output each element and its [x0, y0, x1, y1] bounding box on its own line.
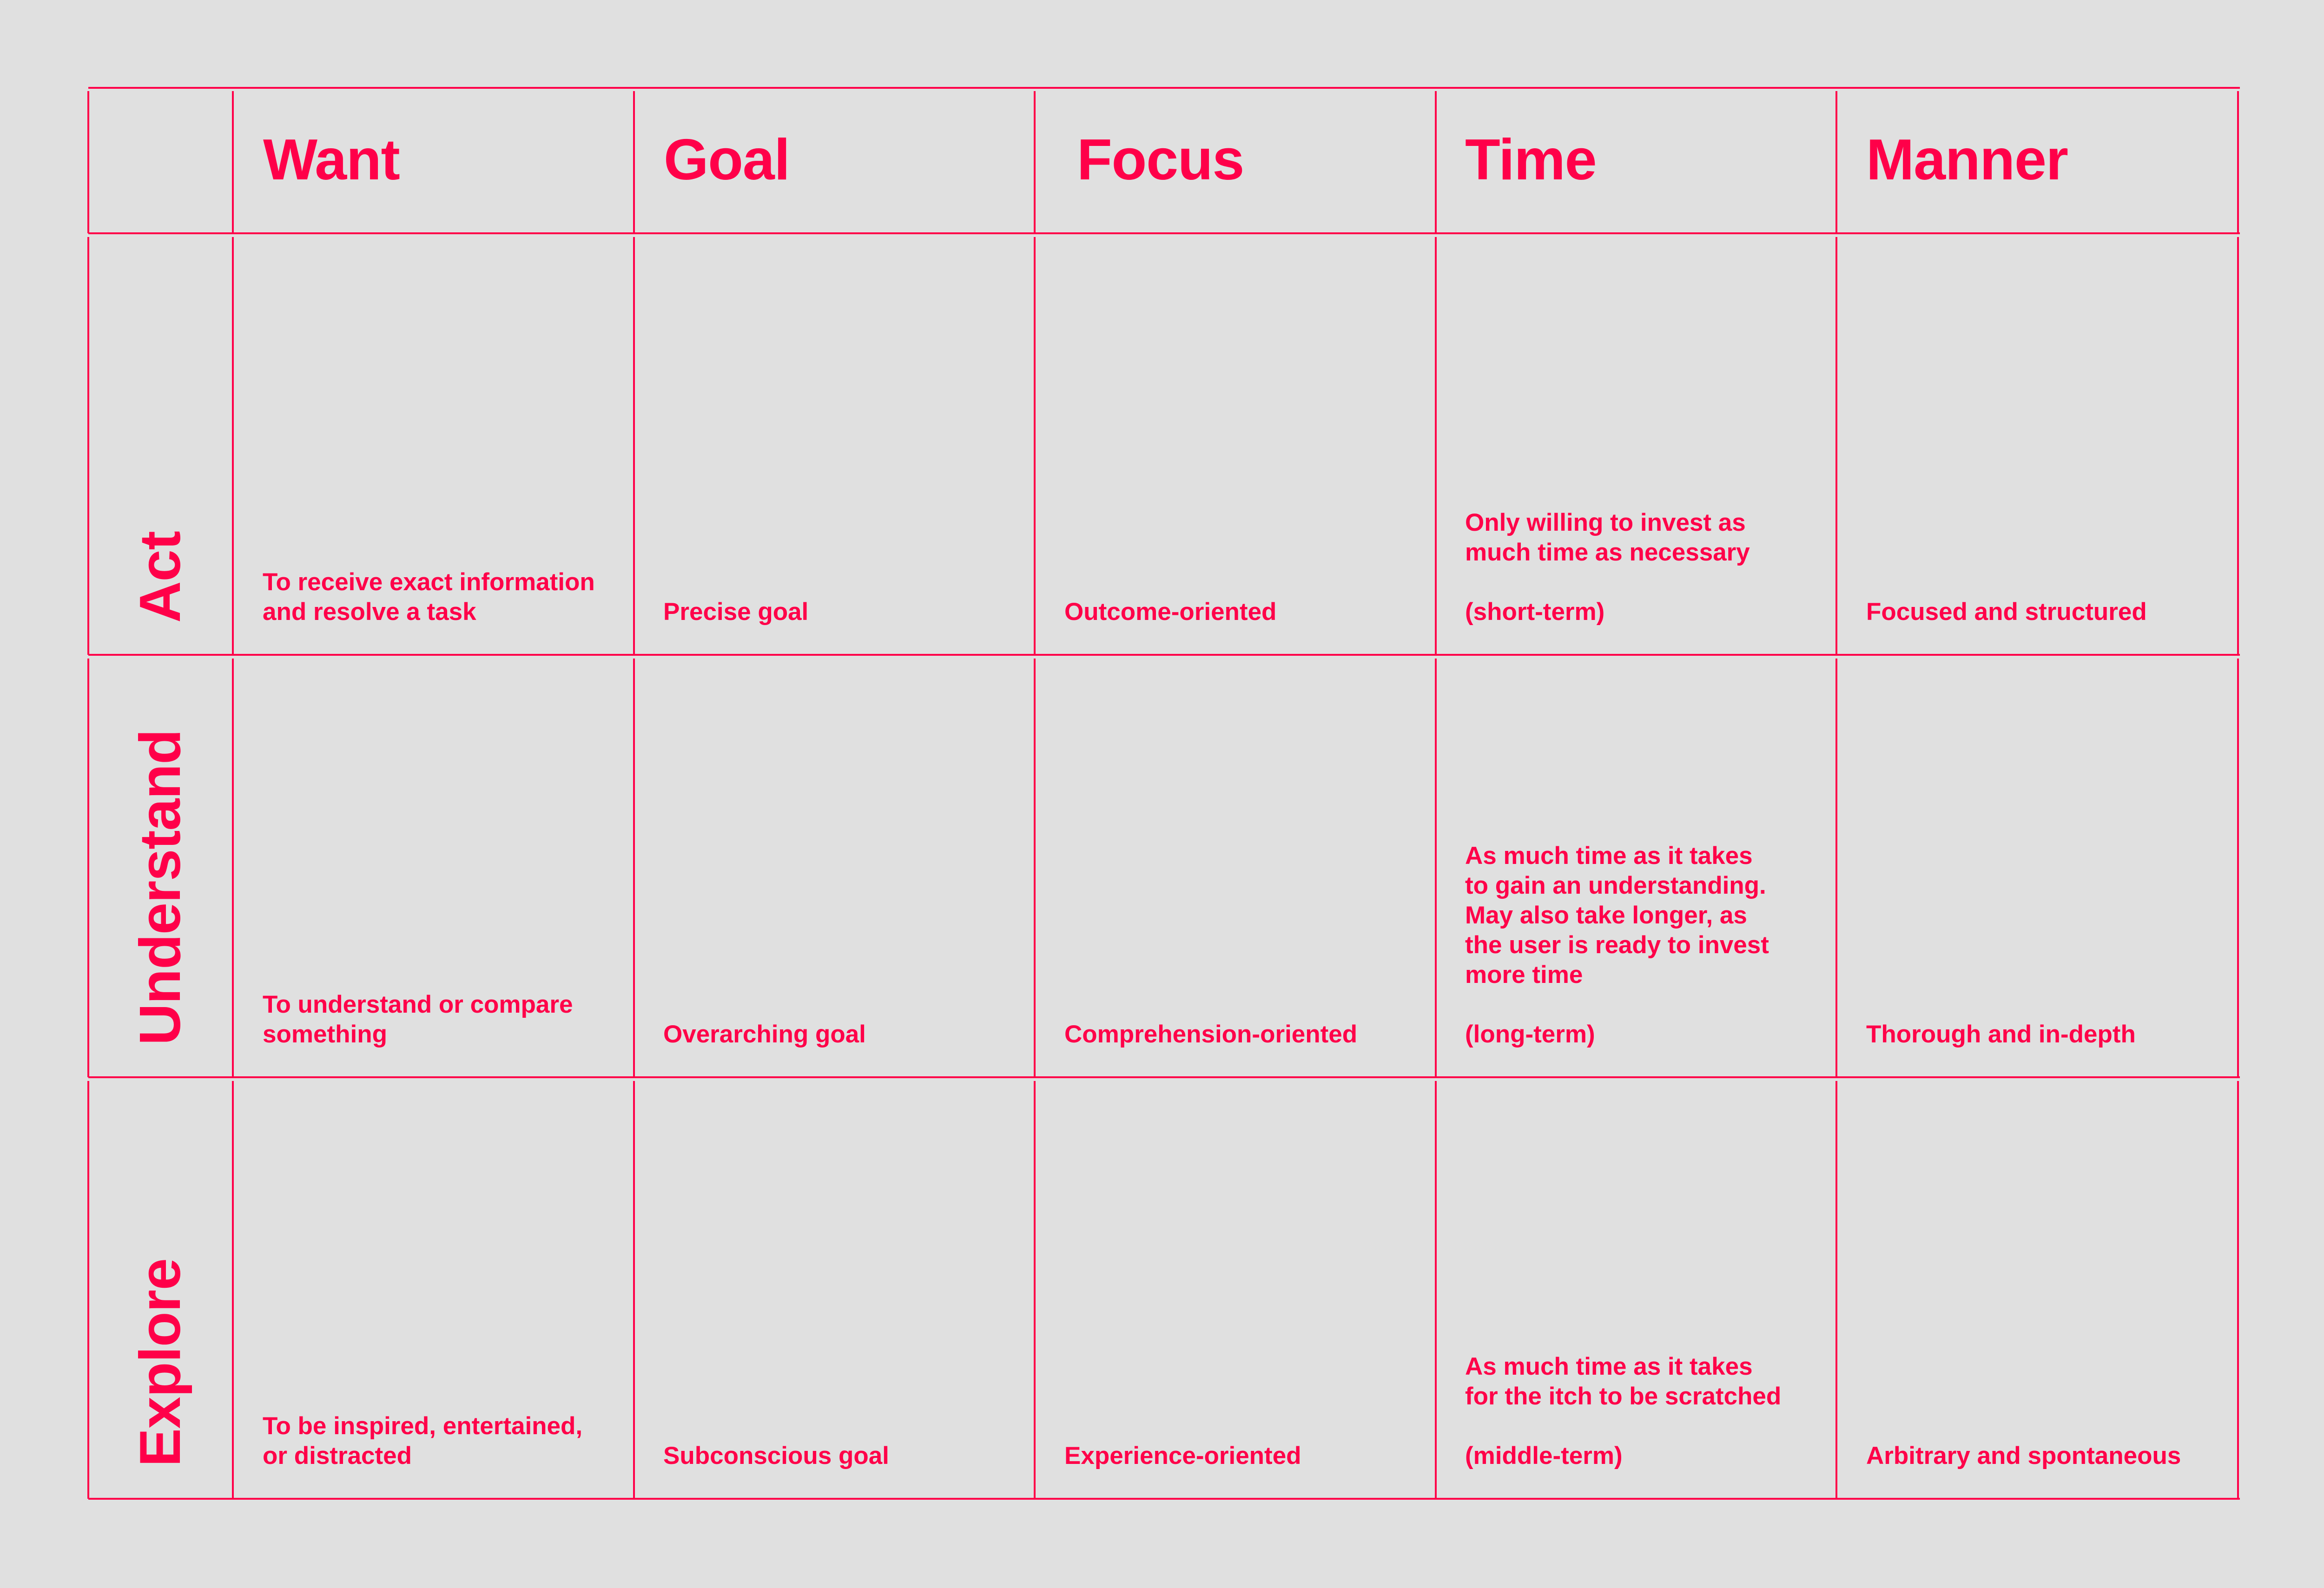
- header: Focus: Focus: [1077, 128, 1244, 192]
- Act: manner: Focused and structured: [1866, 598, 2147, 626]
- Explore: time: (middle-term): [1465, 1442, 1623, 1469]
- Act: time: [1465, 508, 1750, 627]
- Act: time: Only willing to invest as: [1465, 509, 1746, 536]
- Understand: want: To understand or compare: [263, 991, 573, 1018]
- header: Goal: Goal: [664, 128, 790, 192]
- Understand: time: more time: [1465, 961, 1583, 988]
- Understand: time: May also take longer, as: [1465, 902, 1747, 929]
- Explore: goal: Subconscious goal: [663, 1442, 889, 1469]
- Explore: want: or distracted: [263, 1442, 412, 1469]
- header: Manner: Manner: [1866, 128, 2068, 192]
- row label: Understand: Understand: [128, 730, 192, 1045]
- Understand: focus: Comprehension-oriented: [1064, 1021, 1357, 1048]
- Explore: manner: Arbitrary and spontaneous: [1866, 1442, 2181, 1469]
- Act: want: [263, 567, 595, 627]
- Understand: want: something: [263, 1021, 387, 1048]
- Understand: manner: Thorough and in-depth: [1866, 1021, 2136, 1048]
- Act: goal: Precise goal: [663, 598, 808, 626]
- Understand: time: (long-term): [1465, 1021, 1595, 1048]
- row label: Explore: Explore: [128, 1259, 192, 1467]
- header: Want: Want: [263, 128, 400, 192]
- Act: want: and resolve a task: [263, 598, 476, 626]
- Understand: goal: Overarching goal: [663, 1021, 866, 1048]
- Explore: want: To be inspired, entertained,: [263, 1412, 582, 1440]
- Explore: focus: Experience-oriented: [1064, 1442, 1301, 1469]
- Explore: time: As much time as it takes: [1465, 1353, 1753, 1380]
- Understand: time: to gain an understanding.: [1465, 872, 1766, 899]
- Act: time: (short-term): [1465, 598, 1604, 626]
- Explore: want: [263, 1411, 582, 1471]
- Explore: time: for the itch to be scratched: [1465, 1383, 1781, 1410]
- row label: Act: Act: [128, 531, 192, 623]
- header: Time: Time: [1465, 128, 1596, 192]
- Act: want: To receive exact information: [263, 568, 595, 596]
- Understand: want: [263, 990, 573, 1049]
- Understand: time: As much time as it takes: [1465, 842, 1753, 870]
- Act: focus: Outcome-oriented: [1064, 598, 1276, 626]
- Explore: time: [1465, 1352, 1781, 1471]
- Understand: time: the user is ready to invest: [1465, 931, 1769, 959]
- Understand: time: [1465, 841, 1769, 1049]
- Act: time: much time as necessary: [1465, 539, 1750, 566]
